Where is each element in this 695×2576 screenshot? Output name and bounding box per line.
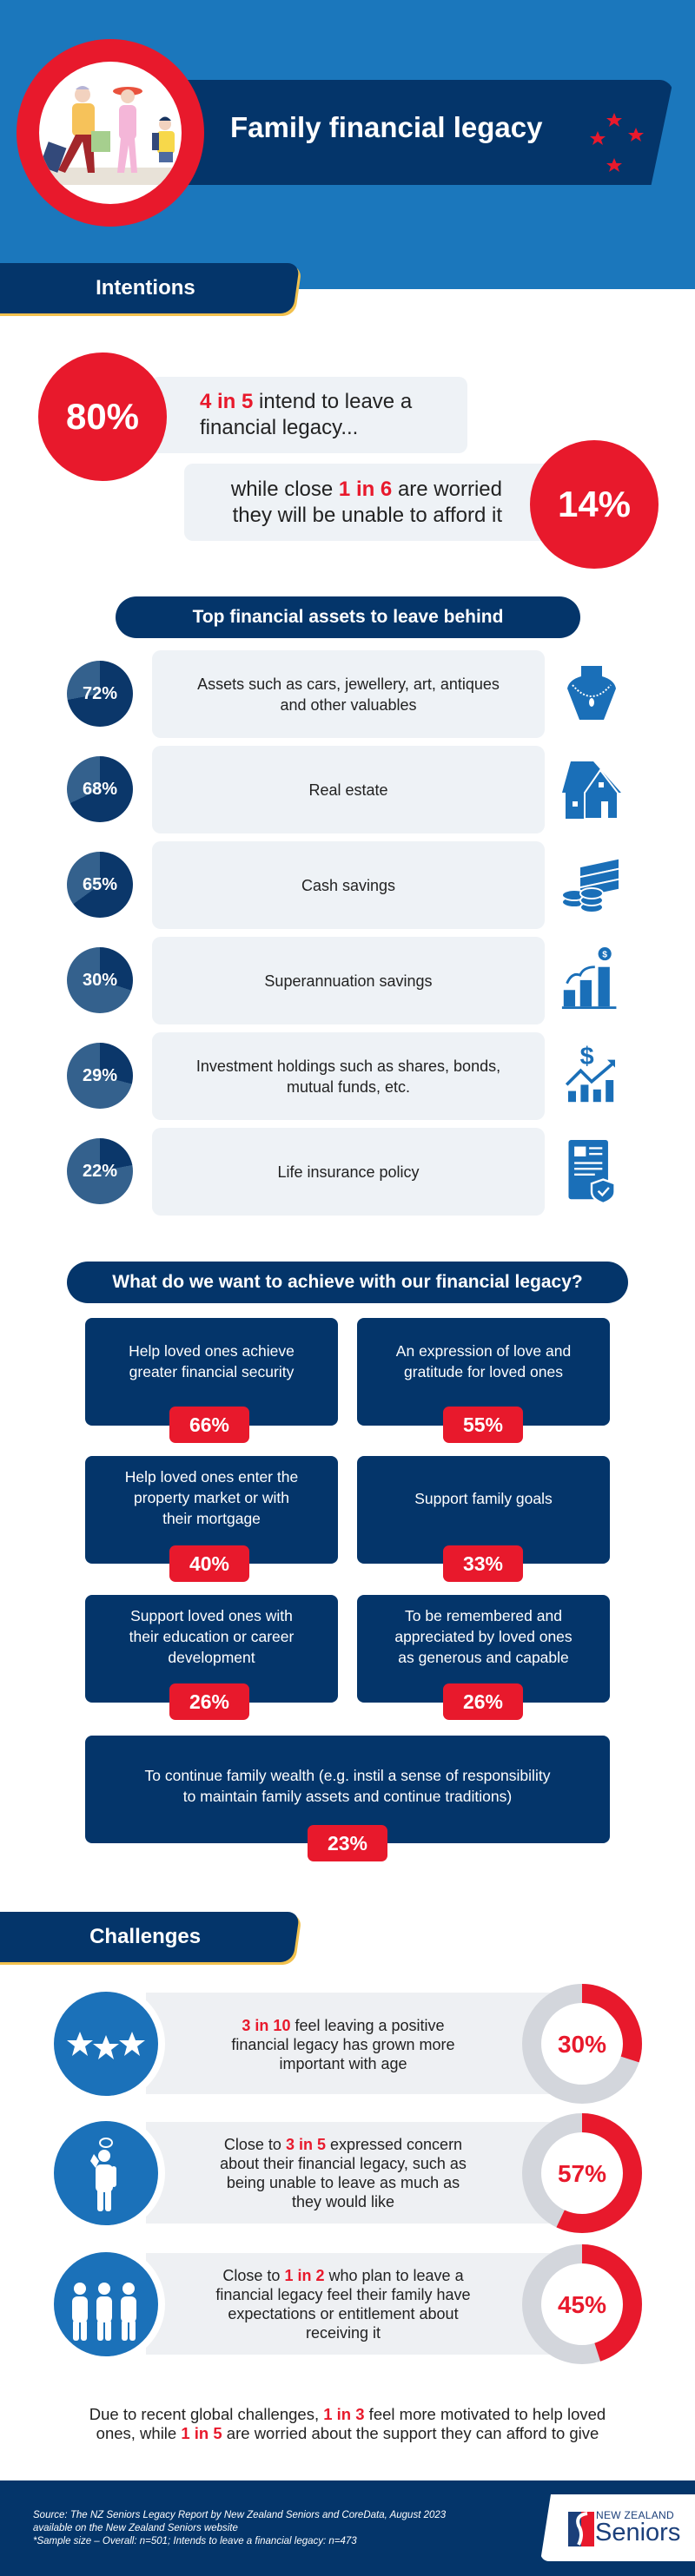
summary text: Due to recent global challenges, 1 in 3 feel more motivated to help loved ones, while 1 in 5 are worried about the support they can afford to give	[89, 2405, 606, 2442]
asset row: investments	[67, 1032, 615, 1120]
tab: Challenges	[0, 1912, 300, 1962]
callout: 14%	[184, 440, 659, 569]
hero illustration circle	[17, 39, 204, 227]
pie 65%	[67, 852, 133, 918]
source text: Source: The NZ Seniors Legacy Report by New Zealand Seniors and CoreData, August 2023 available on the New Zealand Seniors website	[33, 2510, 446, 2533]
stat circle 14%: 14%	[558, 484, 631, 524]
heading: top financial assets: Top financial assets to leave behind	[193, 607, 503, 627]
icon: growth chart	[561, 947, 617, 1009]
pie 68%	[67, 756, 133, 822]
icon: southern cross stars	[590, 113, 644, 172]
card: expression of love	[357, 1318, 610, 1426]
header background	[0, 0, 695, 289]
pie 22%	[67, 1138, 133, 1204]
asset row: valuables	[67, 650, 616, 738]
logo	[540, 2494, 695, 2561]
label	[152, 1128, 545, 1216]
label: and other valuables	[280, 696, 417, 714]
label: Investment holdings such as shares, bonds,	[196, 1057, 500, 1075]
card: financial security: greater financial security	[129, 1363, 294, 1380]
text: 3 in 10 feel leaving a positive financial legacy has grown more important with age	[231, 2017, 455, 2072]
asset row: superannuation	[67, 937, 617, 1024]
badge 66%	[169, 1407, 249, 1443]
card: education: Support loved ones with	[130, 1607, 293, 1624]
source text	[33, 2510, 447, 2546]
tab: Intentions: Intentions	[96, 276, 195, 300]
badge 66%: 66%	[189, 1413, 229, 1436]
badge 55%: 55%	[463, 1413, 503, 1436]
card: remembered: as generous and capable	[398, 1649, 569, 1666]
challenge row 2	[54, 2113, 642, 2233]
icon: group of people	[54, 2252, 158, 2356]
donut 45%	[522, 2244, 642, 2364]
donut 57%	[522, 2113, 642, 2233]
label	[152, 841, 545, 929]
card: continue family wealth: to maintain family assets and continue traditions)	[183, 1788, 512, 1805]
pie 72%: 72%	[83, 684, 117, 703]
card: property market: property market or with	[134, 1489, 289, 1506]
donut 57%: 57%	[558, 2160, 606, 2187]
card: property market	[85, 1456, 338, 1564]
badge 33%	[443, 1545, 523, 1582]
source text: *Sample size – Overall: n=501; Intends to leave a financial legacy: n=473	[33, 2536, 357, 2546]
label: Cash savings	[301, 877, 395, 894]
icon: growth chart: $	[602, 950, 607, 959]
badge 26%: 26%	[463, 1690, 503, 1713]
icon: stars	[54, 1992, 158, 2096]
tab: Challenges: Challenges	[90, 1925, 202, 1948]
card: property market: their mortgage	[162, 1510, 261, 1527]
card: financial security	[85, 1318, 338, 1426]
badge 23%	[308, 1825, 387, 1861]
icon: house	[562, 761, 621, 819]
card: expression of love: gratitude for loved ones	[404, 1363, 563, 1380]
logo: Seniors	[595, 2519, 680, 2546]
badge 26%	[169, 1683, 249, 1720]
label: Life insurance policy	[277, 1163, 420, 1181]
logo mark	[568, 2512, 594, 2546]
label	[152, 746, 545, 833]
callout: 80%	[38, 352, 467, 481]
card: education	[85, 1595, 338, 1703]
pie 29%	[67, 1043, 133, 1109]
asset row: cash	[67, 841, 619, 929]
text box: 4 in 5 intend to leave a financial legacy...	[200, 390, 412, 439]
card: education: their education or career	[129, 1628, 294, 1645]
badge 26%	[443, 1683, 523, 1720]
card: education: development	[168, 1649, 255, 1666]
pie 65%: 65%	[83, 875, 117, 894]
donut 30%	[522, 1984, 642, 2104]
stat circle 80%: 80%	[66, 396, 139, 437]
card: remembered	[357, 1595, 610, 1703]
badge 26%: 26%	[189, 1690, 229, 1713]
text box: they will be unable to afford it	[233, 504, 502, 527]
card: family goals	[357, 1456, 610, 1564]
heading: top financial assets	[116, 596, 580, 638]
icon: investment chart	[566, 1043, 615, 1103]
text: Close to 3 in 5 expressed concern about their financial legacy, such as being unable to leave as much as they would like	[220, 2136, 467, 2210]
stat circle 80%	[38, 352, 167, 481]
badge 23%: 23%	[328, 1832, 367, 1855]
card: financial security: Help loved ones achieve	[129, 1342, 295, 1360]
stat circle 14%	[530, 440, 659, 569]
asset row: life insurance	[67, 1128, 613, 1216]
challenge row 3	[54, 2244, 642, 2364]
pie 72%	[67, 661, 133, 727]
label: Superannuation savings	[264, 972, 433, 990]
label	[152, 1032, 545, 1120]
card: remembered: To be remembered and	[405, 1607, 562, 1624]
logo text: NEW ZEALAND	[596, 2509, 674, 2521]
badge 40%: 40%	[189, 1552, 229, 1575]
text box: while close 1 in 6 are worried	[231, 478, 502, 501]
card: property market: Help loved ones enter the	[125, 1468, 298, 1486]
label: mutual funds, etc.	[287, 1078, 410, 1096]
text: Close to 1 in 2 who plan to leave a financial legacy feel their family have expectations or entitlement about receiving it	[215, 2267, 471, 2342]
heading: what do we want to achieve: What do we want to achieve with our financial legacy?	[112, 1272, 583, 1292]
footer	[0, 2480, 695, 2576]
card: continue family wealth	[85, 1736, 610, 1843]
heading: what do we want to achieve	[67, 1262, 628, 1303]
card: expression of love: An expression of love and	[396, 1342, 571, 1360]
icon: cash and coins	[563, 860, 619, 912]
pie 30%: 30%	[83, 971, 117, 990]
card: continue family wealth: To continue family wealth (e.g. instil a sense of responsibility	[145, 1767, 550, 1784]
text box	[184, 464, 558, 541]
badge 33%: 33%	[463, 1552, 503, 1575]
icon: investment chart: $	[580, 1043, 594, 1071]
pie 29%: 29%	[83, 1066, 117, 1085]
icon: policy document	[568, 1140, 613, 1202]
badge 40%	[169, 1545, 249, 1582]
donut 30%: 30%	[558, 2031, 606, 2058]
tab: Intentions	[0, 263, 300, 313]
icon: necklace bust	[567, 666, 616, 720]
card: family goals: Support family goals	[414, 1490, 553, 1507]
title: Family financial legacy	[230, 111, 542, 143]
icon: worried person	[54, 2121, 158, 2225]
label: Assets such as cars, jewellery, art, antiques	[197, 675, 500, 693]
pie 30%	[67, 947, 133, 1013]
badge 55%	[443, 1407, 523, 1443]
card: remembered: appreciated by loved ones	[394, 1628, 573, 1645]
label	[152, 650, 545, 738]
pie 68%: 68%	[83, 780, 117, 799]
asset row: real estate	[67, 746, 621, 833]
title banner	[182, 80, 673, 185]
text box	[150, 377, 467, 453]
donut 45%: 45%	[558, 2291, 606, 2318]
challenge row 1	[54, 1984, 642, 2104]
label: Real estate	[308, 781, 388, 799]
label	[152, 937, 545, 1024]
pie 22%: 22%	[83, 1162, 117, 1181]
